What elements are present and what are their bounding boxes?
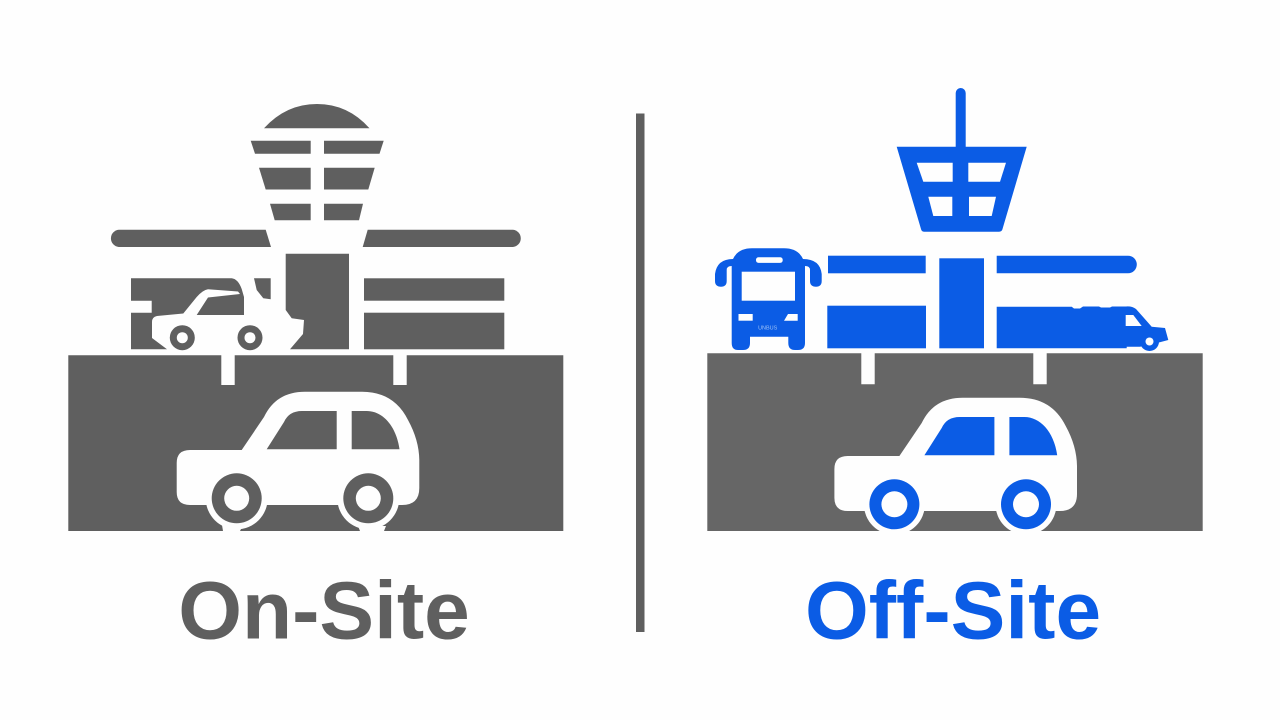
icon: on-site control tower: [251, 104, 384, 220]
icon: on-site small car at terminal: [131, 278, 262, 350]
icon: on-site large car: [177, 392, 419, 531]
heading: off-site: Off-Site: [805, 566, 1101, 656]
icon: truck: [997, 306, 1168, 351]
on-site parking ground: [68, 355, 563, 531]
icon: bus: UNBUS: [758, 326, 778, 332]
heading: on-site: On-Site: [178, 566, 470, 656]
off-site parking ground: [707, 353, 1203, 531]
icon: off-site control tower: [897, 88, 1027, 232]
panel: off-site: [707, 88, 1203, 656]
panel: on-site: [68, 104, 563, 656]
icon: bus: [715, 248, 822, 350]
icon: off-site terminal building: [827, 256, 1137, 348]
icon: off-site large car: [834, 398, 1077, 535]
icon: on-site terminal building: [111, 230, 521, 349]
divider: [636, 114, 644, 632]
